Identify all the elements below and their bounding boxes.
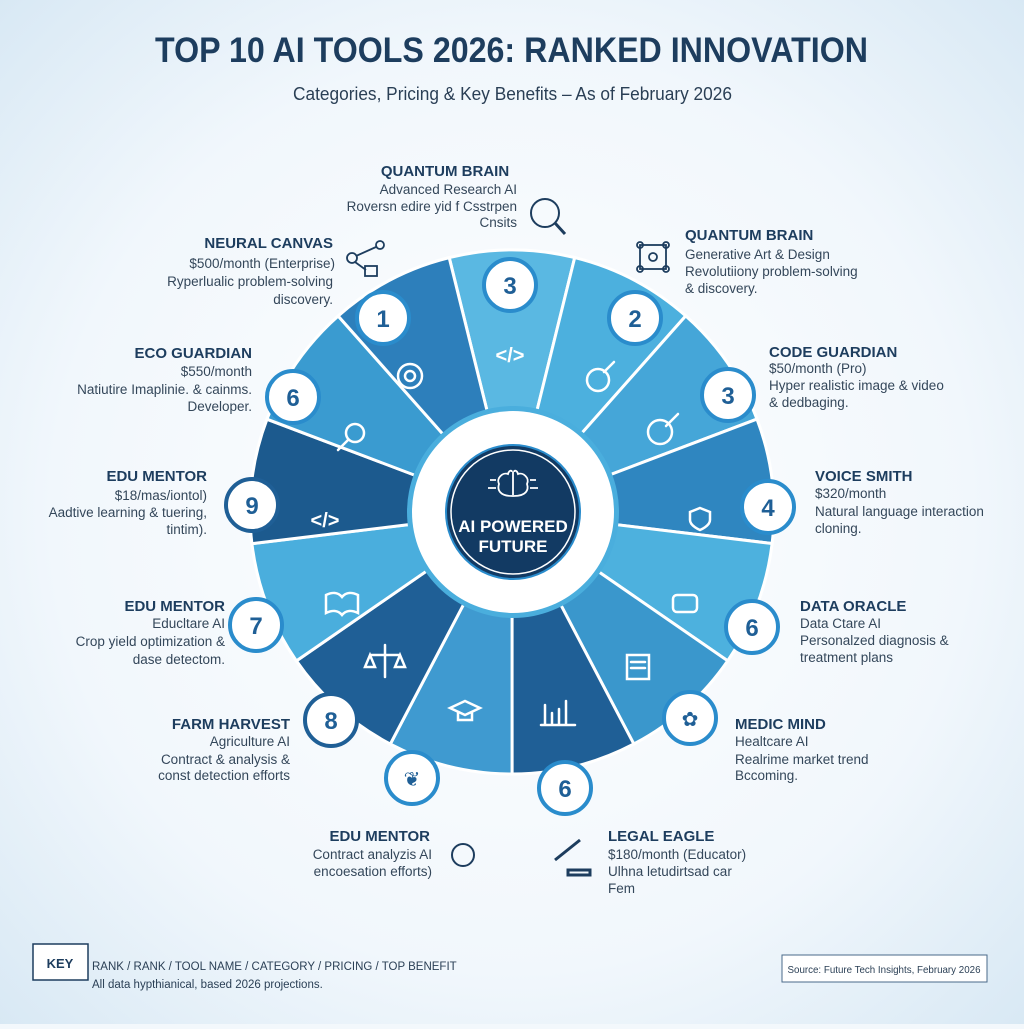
tool: farm harvest [158,716,290,783]
tool: farm harvest: Contract & analysis & [161,752,290,767]
center hub: FUTURE [479,537,547,556]
tool: legal eagle [555,828,746,896]
tool: quantum brain right: Generative Art & Design [685,247,830,262]
tool: eco guardian: ECO GUARDIAN [134,345,252,362]
tool: quantum brain top [347,163,565,234]
tool: neural canvas: Ryperlualic problem-solving [167,274,333,289]
subtitle: Categories, Pricing & Key Benefits – As of February 2026 [293,84,732,104]
icon: brain [488,471,538,497]
tool: voice smith: Natural language interaction [815,504,984,519]
wedge icons: </> [311,510,339,532]
center hub [407,406,619,618]
key box [33,944,457,991]
rank badges: 3 [721,383,735,410]
tool: medic mind: Healtcare AI [735,734,809,749]
tool: edu mentor left: EDU MENTOR [106,468,207,485]
rank badges: 8 [324,708,338,735]
rank badges: 9 [245,493,259,520]
tool: legal eagle: Ulhna letudirtsad car [608,864,732,879]
rank badges: 2 [628,306,642,333]
tool: legal eagle: Fem [608,881,635,896]
tool: quantum brain top: Cnsits [479,215,517,230]
source box [782,955,987,982]
tool: data oracle [800,598,949,665]
wedge icons: </> [496,345,524,367]
tool: neural canvas: discovery. [273,292,333,307]
rank badges: 6 [286,385,300,412]
rank badges: 6 [745,615,759,642]
tool: edu mentor bottom: EDU MENTOR [329,828,430,845]
tool: data oracle: Data Ctare AI [800,616,881,631]
rank badges: 6 [558,776,572,803]
tool: edu mentor bottom: encoesation efforts) [314,864,432,879]
rank badges: ✿ [682,709,698,731]
tool: edu mentor left: tintim). [166,522,207,537]
tool: eco guardian: Developer. [187,399,252,414]
tool: neural canvas: $500/month (Enterprise) [189,256,335,271]
tool: eco guardian: Natiutire Imaplinie. & cainms. [77,382,252,397]
tool: medic mind: MEDIC MIND [735,716,826,733]
tool: edu mentor 2: Crop yield optimization & [76,634,225,649]
tool: code guardian: CODE GUARDIAN [769,344,897,361]
tool: edu mentor 2: Educltare AI [152,616,225,631]
tool: eco guardian: $550/month [181,364,252,379]
tool: quantum brain right: Revolutiiony problem-solving [685,264,858,279]
tool: edu mentor 2 [76,598,225,667]
tool: voice smith: VOICE SMITH [815,468,913,485]
tool: medic mind: Bccoming. [735,768,798,783]
tool: edu mentor 2: EDU MENTOR [124,598,225,615]
tool: voice smith [815,468,984,536]
key box: All data hypthianical, based 2026 projections. [92,979,323,991]
tool: quantum brain top: Advanced Research AI [380,182,517,197]
tool: quantum brain right: QUANTUM BRAIN [685,227,813,244]
tool: quantum brain top: Roversn edire yid f Csstrpen [347,199,517,214]
tool: farm harvest: Agriculture AI [210,734,290,749]
tool: code guardian: $50/month (Pro) [769,361,867,376]
tool: neural canvas: NEURAL CANVAS [204,235,333,252]
tool: edu mentor left [49,468,207,537]
tool: edu mentor bottom [313,828,474,879]
rank badges: 3 [503,273,517,300]
rank badges: ❦ [404,769,420,791]
wedge icons [311,345,710,725]
tool: voice smith: $320/month [815,486,886,501]
tool: farm harvest: FARM HARVEST [172,716,290,733]
tool: quantum brain right: & discovery. [685,281,758,296]
rank badges: 1 [376,306,390,333]
tool: data oracle: Personalzed diagnosis & [800,633,949,648]
tool: edu mentor left: $18/mas/iontol) [115,488,207,503]
key box: KEY [47,956,74,971]
tool: neural canvas [167,235,384,307]
tool: legal eagle: LEGAL EAGLE [608,828,714,845]
tool: edu mentor left: Aadtive learning & tuering, [49,505,207,520]
rank badges [226,259,794,814]
tool: edu mentor bottom: Contract analyzis AI [313,847,432,862]
tool: medic mind [735,716,869,783]
tool: quantum brain right [637,227,858,296]
tool: voice smith: cloning. [815,521,862,536]
tool: code guardian: Hyper realistic image & video [769,378,944,393]
rank badges: 4 [761,495,775,522]
wheel [244,250,780,781]
tool: code guardian: & dedbaging. [769,395,849,410]
tool: code guardian [769,344,944,410]
title: TOP 10 AI TOOLS 2026: RANKED INNOVATION [155,31,868,70]
tool: edu mentor 2: dase detectom. [133,652,225,667]
tool: farm harvest: const detection efforts [158,768,290,783]
center hub: AI POWERED [458,517,568,536]
tool: data oracle: DATA ORACLE [800,598,906,615]
tool: legal eagle: $180/month (Educator) [608,847,746,862]
key box: RANK / RANK / TOOL NAME / CATEGORY / PRICING / TOP BENEFIT [92,961,457,973]
rank badges: 7 [249,613,263,640]
tool: eco guardian [77,345,252,414]
source box: Source: Future Tech Insights, February 2026 [788,964,981,976]
tool: data oracle: treatment plans [800,650,893,665]
tool: medic mind: Realrime market trend [735,752,869,767]
tool: quantum brain top: QUANTUM BRAIN [381,163,509,180]
